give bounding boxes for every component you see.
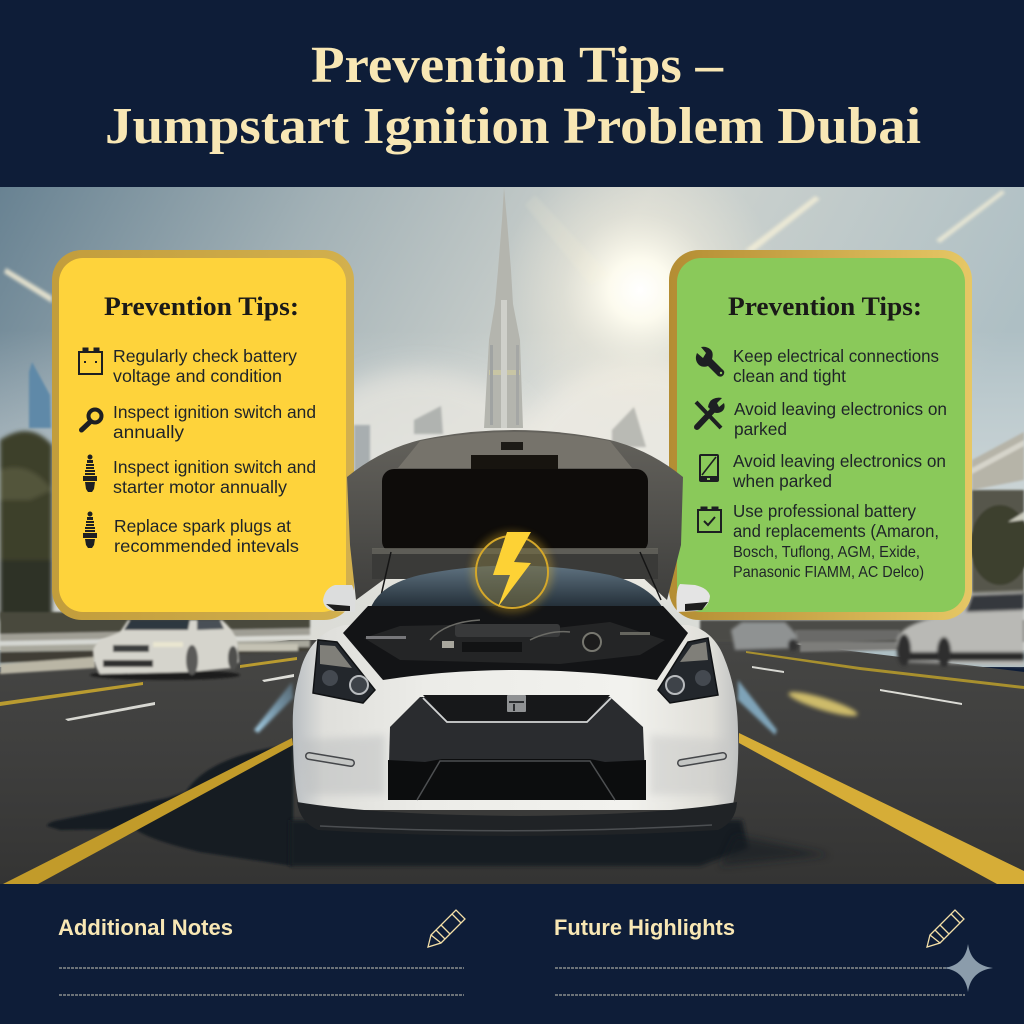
- windshield: [370, 566, 664, 610]
- tip: ignition switch: annually: [113, 422, 184, 442]
- icon: wrench: [696, 347, 724, 377]
- title: Jumpstart Ignition Problem Dubai: [105, 98, 921, 155]
- right overpass and palm: [970, 432, 1024, 595]
- tip: spark plugs: recommended intevals: [114, 536, 299, 556]
- badge: [507, 695, 526, 712]
- sun rays: [4, 190, 1005, 303]
- tip: professional battery: Use professional battery: [733, 501, 916, 521]
- tip: battery: Regularly check battery: [113, 346, 297, 366]
- car shadow: [47, 745, 830, 866]
- icon: pencil: [927, 910, 964, 947]
- tip: ignition switch: [82, 402, 316, 442]
- car body: [293, 625, 738, 810]
- Burj Khalifa tower: [484, 188, 523, 428]
- tip: electrical connections: Keep electrical connections: [733, 346, 939, 366]
- tip: electronics when parked: when parked: [732, 471, 832, 491]
- tip: professional battery: and replacements (Amaron,: [733, 521, 939, 541]
- tip: electronics when parked: Avoid leaving electronics on: [733, 451, 946, 471]
- panel: green prevention tips: [669, 250, 972, 620]
- icon: spark plug: [83, 512, 97, 548]
- open hood: [347, 430, 683, 600]
- icon: sparkle star: [944, 944, 993, 992]
- icon: pencil: [428, 910, 465, 947]
- icon: key: [82, 410, 102, 430]
- tip: battery: voltage and condition: [113, 366, 282, 386]
- tip: starter motor: starter motor annually: [113, 477, 287, 497]
- guard rails: [0, 612, 1024, 674]
- title: Prevention Tips –: [311, 37, 724, 94]
- front grille: [388, 695, 646, 800]
- lane markings: [0, 651, 1024, 884]
- tip: electronics parked: parked: [734, 419, 787, 439]
- panel: yellow prevention tips: [52, 250, 354, 620]
- tip: electronics parked: [696, 398, 947, 439]
- icon: tablet: [699, 454, 719, 482]
- heading: right panel: Prevention Tips:: [728, 292, 922, 321]
- tip: starter motor: [83, 454, 316, 497]
- background car left: [90, 620, 240, 680]
- left palm trees: [0, 431, 52, 630]
- distant towers: [29, 362, 646, 475]
- engine bay: [343, 606, 688, 680]
- notes column: future highlights: [554, 910, 965, 995]
- footer band: [0, 884, 1024, 1024]
- notes column: additional notes: [58, 910, 465, 995]
- tip: spark plugs: Replace spark plugs at: [114, 516, 291, 536]
- tip: spark plugs: [83, 512, 299, 556]
- tip: professional battery: [698, 501, 939, 581]
- tip: professional battery: Panasonic FIAMM, AC Delco): [733, 564, 924, 581]
- tip: professional battery: Bosch, Tuflong, AGM, Exide,: [733, 544, 920, 561]
- car: white sports car with open hood: [293, 430, 738, 836]
- tip: ignition switch: Inspect ignition switch and: [113, 402, 316, 422]
- notes column: additional notes: Additional Notes: [58, 915, 233, 940]
- title: [105, 37, 921, 155]
- fog lights: [309, 756, 723, 763]
- notes column: future highlights: Future Highlights: [554, 915, 735, 940]
- headlights: [313, 638, 718, 703]
- mirrors: [323, 584, 710, 612]
- photo: Dubai highway background: [0, 150, 1024, 884]
- icon: checklist battery: [698, 507, 721, 532]
- front splitter: [297, 802, 737, 836]
- heading: left panel: Prevention Tips:: [104, 292, 299, 321]
- body shading: [300, 735, 730, 795]
- icon: spark plug: [83, 454, 97, 492]
- header band: [0, 0, 1024, 187]
- icon: crossed tools: [696, 398, 725, 428]
- tip: electronics when parked: [699, 451, 946, 491]
- tip: electronics parked: Avoid leaving electronics on: [734, 399, 947, 419]
- tip: electrical connections: [696, 346, 939, 386]
- background cars right: [731, 591, 1024, 667]
- tip: electrical connections: clean and tight: [733, 366, 846, 386]
- road: [0, 640, 1024, 884]
- tip: starter motor: Inspect ignition switch and: [113, 457, 316, 477]
- tip: battery: [79, 346, 297, 386]
- light streaks by headlights: [254, 680, 777, 735]
- icon: battery: [79, 348, 102, 374]
- lightning bolt in glowing circle: [471, 531, 553, 613]
